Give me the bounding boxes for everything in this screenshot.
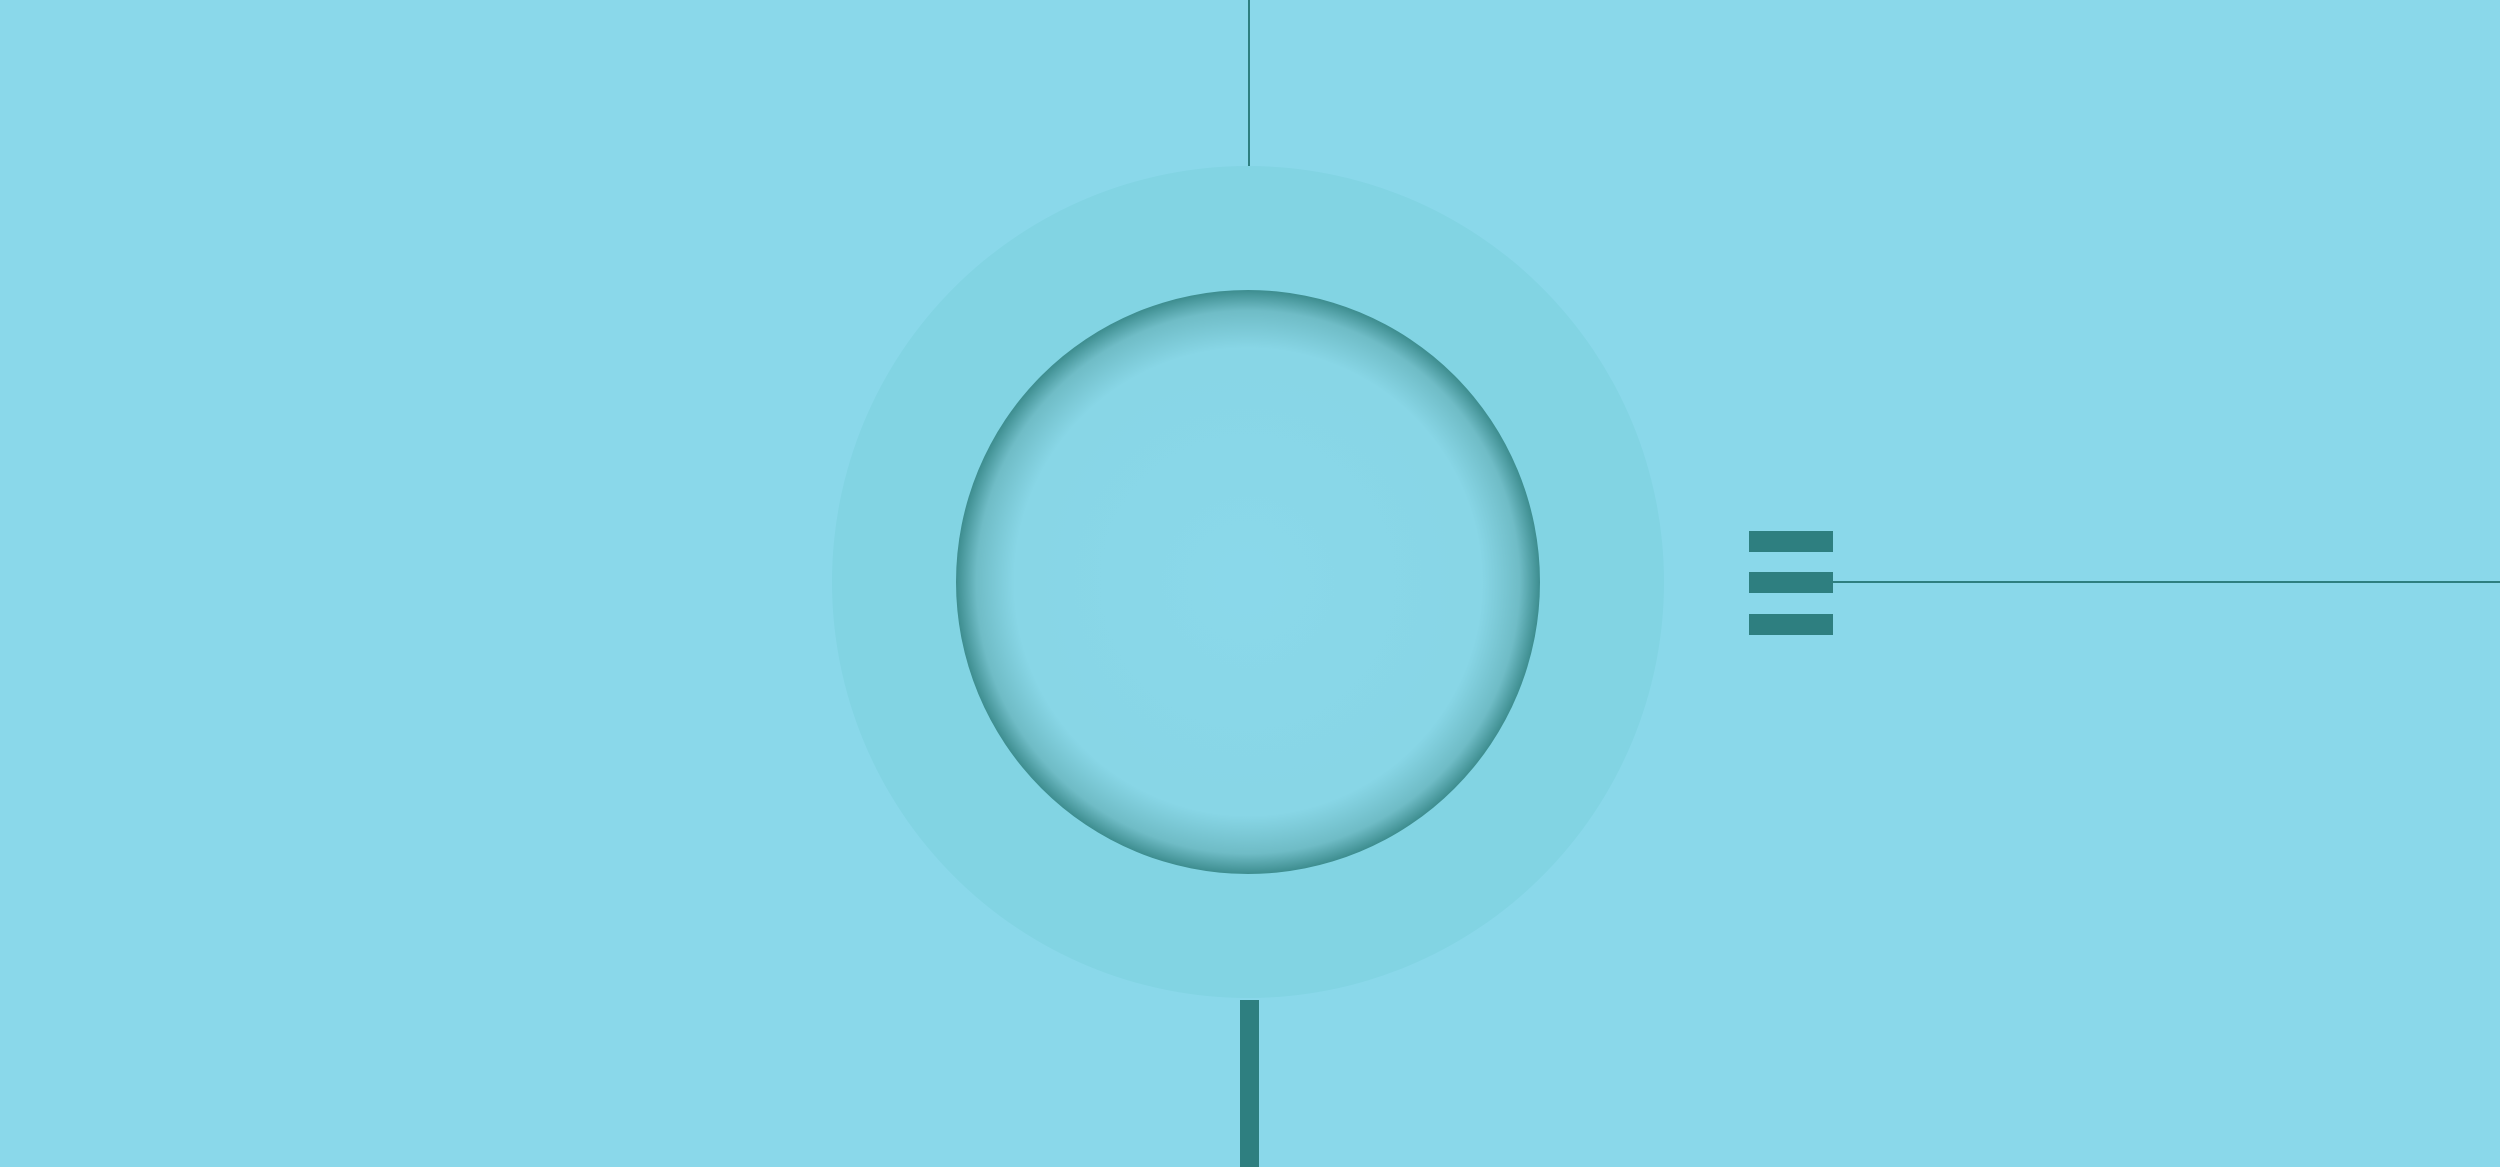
right connector line <box>1833 581 2500 583</box>
top connector line <box>1248 0 1250 166</box>
icon: menu bars <box>1749 531 1833 635</box>
central ring graphic <box>834 166 1662 998</box>
inner circle <box>956 290 1540 874</box>
bottom connector bar <box>1240 1000 1259 1167</box>
outer ring <box>832 166 1664 998</box>
